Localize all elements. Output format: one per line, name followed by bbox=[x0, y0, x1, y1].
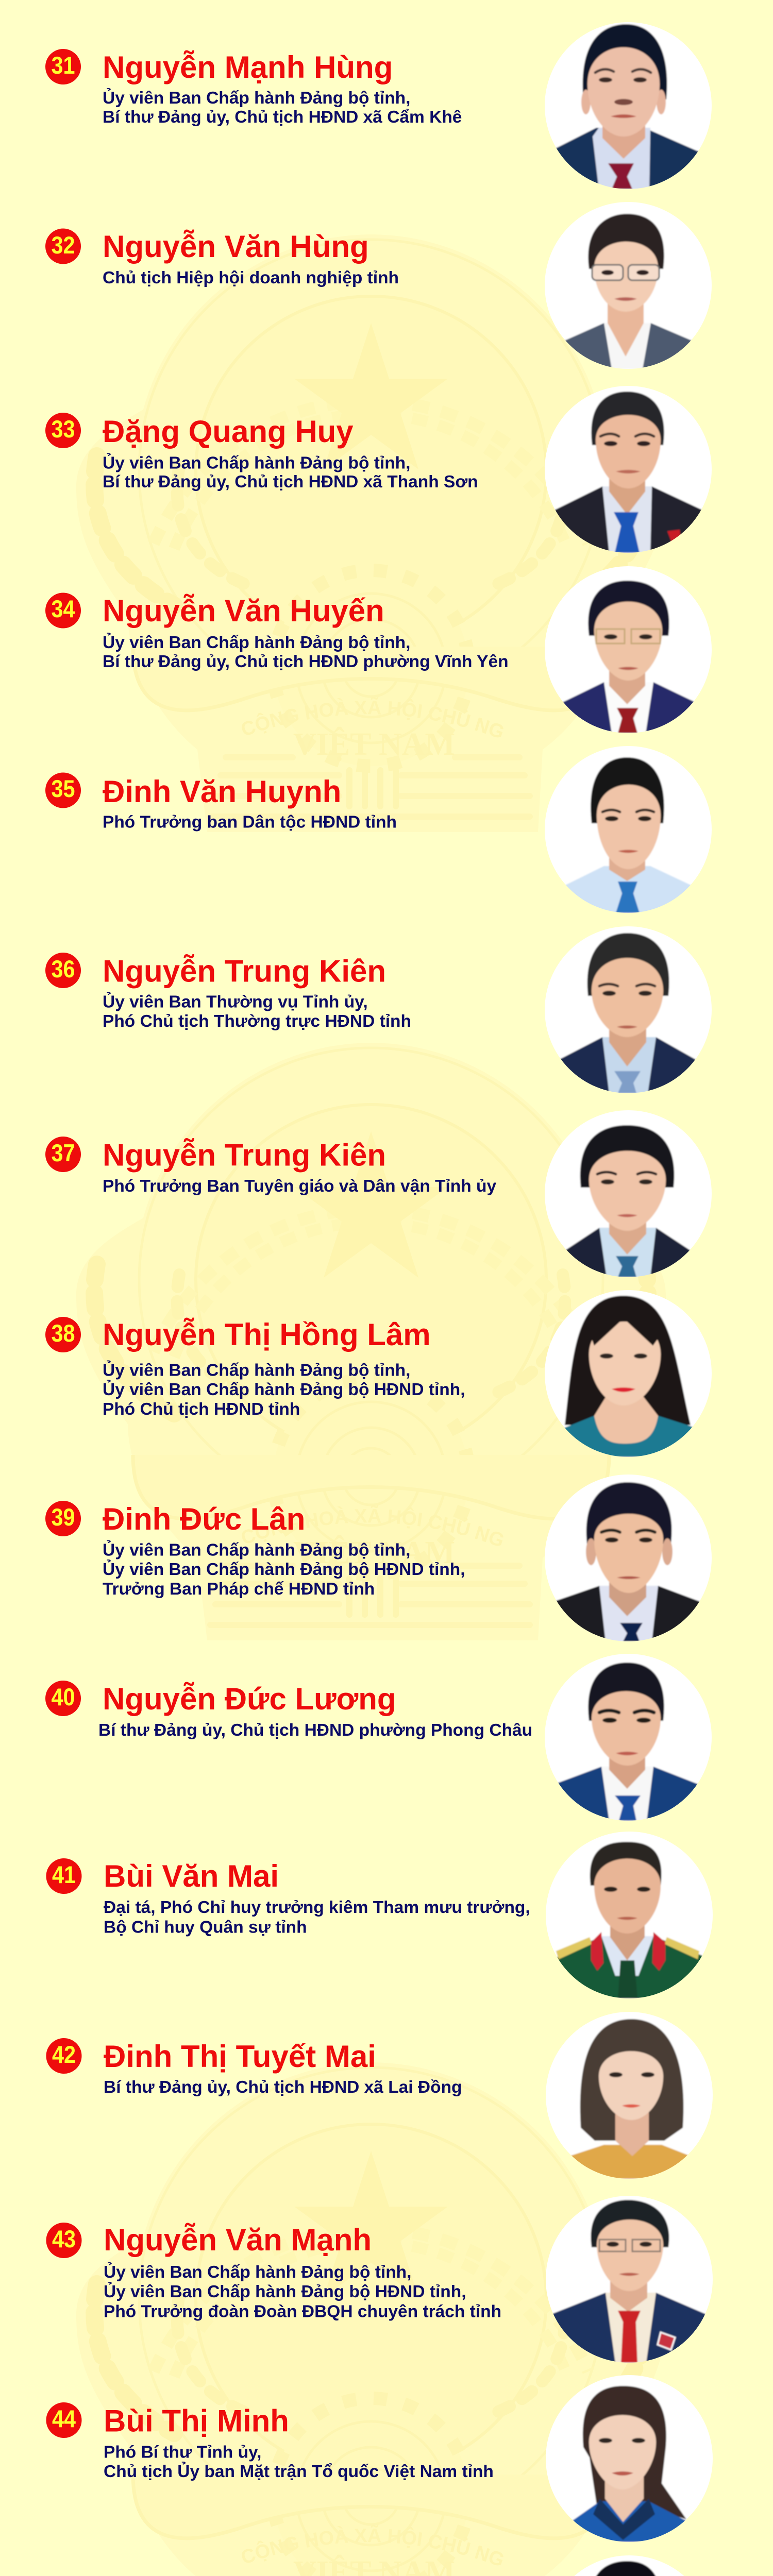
number badge 40: 40 bbox=[52, 1683, 75, 1710]
emblem watermark 2 bbox=[76, 1043, 666, 1640]
number badge 34 bbox=[45, 592, 81, 629]
name 43: Nguyễn Văn Mạnh bbox=[104, 2223, 372, 2257]
role 32: Chủ tịch Hiệp hội doanh nghiệp tỉnh bbox=[103, 268, 399, 287]
number badge 38: 38 bbox=[52, 1319, 75, 1347]
entry 34 bbox=[45, 562, 716, 737]
portrait 36 bbox=[541, 922, 716, 1097]
role 39: Trưởng Ban Pháp chế HĐND tỉnh bbox=[103, 1580, 375, 1599]
number badge 44 bbox=[46, 2402, 81, 2438]
role 43: Ủy viên Ban Chấp hành Đảng bộ HĐND tỉnh, bbox=[104, 2282, 466, 2301]
number badge 31 bbox=[45, 49, 81, 84]
emblem watermark 1: VIỆT NAM bbox=[293, 727, 455, 762]
name 33: Đặng Quang Huy bbox=[103, 414, 354, 449]
entry 42 bbox=[46, 2008, 717, 2183]
emblem watermark 3: CỘNG HOÀ XÃ HỘI CHỦ NGHĨA bbox=[242, 2525, 503, 2566]
emblem watermark 1: CỘNG HOÀ XÃ HỘI CHỦ NGHĨA bbox=[242, 697, 503, 738]
number badge 40 bbox=[45, 1681, 81, 1716]
role 38: Phó Chủ tịch HĐND tỉnh bbox=[103, 1400, 300, 1419]
name 39: Đinh Đức Lân bbox=[103, 1502, 305, 1536]
role 33: Ủy viên Ban Chấp hành Đảng bộ tỉnh, bbox=[103, 453, 410, 473]
name 34: Nguyễn Văn Huyến bbox=[103, 594, 384, 628]
number badge 34: 34 bbox=[52, 595, 75, 622]
portrait 40 bbox=[541, 1650, 716, 1825]
portrait 32 bbox=[541, 198, 716, 373]
number badge 43 bbox=[46, 2223, 81, 2258]
role 33: Bí thư Đảng ủy, Chủ tịch HĐND xã Thanh Sơn bbox=[103, 472, 478, 492]
name 35: Đinh Văn Huynh bbox=[103, 774, 341, 809]
number badge 31: 31 bbox=[52, 52, 75, 79]
entry 38 bbox=[45, 1286, 716, 1461]
portrait 33 bbox=[541, 382, 716, 557]
name 37: Nguyễn Trung Kiên bbox=[103, 1138, 386, 1173]
emblem watermark 2: VIỆT NAM bbox=[293, 1535, 455, 1570]
role 38: Ủy viên Ban Chấp hành Đảng bộ HĐND tỉnh, bbox=[103, 1380, 465, 1399]
role 34: Bí thư Đảng ủy, Chủ tịch HĐND phường Vĩnh Yên bbox=[103, 652, 509, 671]
entry 31 bbox=[45, 18, 716, 193]
number badge 37: 37 bbox=[52, 1139, 75, 1166]
role 35: Phó Trưởng ban Dân tộc HĐND tỉnh bbox=[103, 813, 397, 832]
name 32: Nguyễn Văn Hùng bbox=[103, 229, 369, 264]
number badge 32 bbox=[45, 229, 81, 264]
role 39: Ủy viên Ban Chấp hành Đảng bộ tỉnh, bbox=[103, 1540, 410, 1560]
number badge 38 bbox=[45, 1317, 81, 1352]
entry 39 bbox=[45, 1470, 716, 1646]
role 43: Ủy viên Ban Chấp hành Đảng bộ tỉnh, bbox=[104, 2262, 411, 2282]
role 44: Phó Bí thư Tỉnh ủy, bbox=[104, 2443, 262, 2462]
number badge 37 bbox=[45, 1137, 81, 1172]
portrait 44 bbox=[542, 2371, 717, 2546]
number badge 36 bbox=[45, 953, 81, 988]
entry 43 bbox=[46, 2192, 717, 2367]
role 34: Ủy viên Ban Chấp hành Đảng bộ tỉnh, bbox=[103, 633, 410, 652]
role 31: Ủy viên Ban Chấp hành Đảng bộ tỉnh, bbox=[103, 88, 410, 108]
number badge 35 bbox=[45, 773, 81, 808]
portrait 38 bbox=[541, 1286, 716, 1461]
entry 44 bbox=[46, 2371, 717, 2546]
emblem watermark 2: CỘNG HOÀ XÃ HỘI CHỦ NGHĨA bbox=[242, 1505, 503, 1546]
portrait 43 bbox=[542, 2192, 717, 2367]
number badge 39: 39 bbox=[52, 1503, 75, 1531]
portrait 41 bbox=[542, 1827, 717, 2003]
role 38: Ủy viên Ban Chấp hành Đảng bộ tỉnh, bbox=[103, 1360, 410, 1380]
number badge 43: 43 bbox=[52, 2225, 76, 2252]
portrait 39 bbox=[541, 1470, 716, 1646]
number badge 36: 36 bbox=[52, 955, 75, 982]
portrait 37 bbox=[541, 1106, 716, 1281]
portrait 35 bbox=[541, 742, 716, 917]
portrait 45 bbox=[542, 2551, 717, 2576]
number badge 41 bbox=[46, 1858, 81, 1894]
name 42: Đinh Thị Tuyết Mai bbox=[104, 2039, 376, 2074]
role 37: Phó Trưởng Ban Tuyên giáo và Dân vận Tỉnh ủy bbox=[103, 1177, 496, 1196]
entry 32 bbox=[45, 198, 716, 373]
role 42: Bí thư Đảng ủy, Chủ tịch HĐND xã Lai Đồng bbox=[104, 2078, 462, 2097]
portrait 34 bbox=[541, 562, 716, 737]
role 41: Bộ Chỉ huy Quân sự tỉnh bbox=[104, 1918, 307, 1937]
role 40: Bí thư Đảng ủy, Chủ tịch HĐND phường Phong Châu bbox=[98, 1721, 532, 1740]
entry 41 bbox=[46, 1827, 717, 2003]
role 43: Phó Trưởng đoàn Đoàn ĐBQH chuyên trách tỉnh bbox=[104, 2302, 501, 2321]
number badge 32: 32 bbox=[52, 231, 75, 259]
name 44: Bùi Thị Minh bbox=[104, 2404, 289, 2438]
name 41: Bùi Văn Mai bbox=[104, 1859, 279, 1893]
number badge 42: 42 bbox=[52, 2041, 76, 2068]
entry 36 bbox=[45, 922, 716, 1097]
name 36: Nguyễn Trung Kiên bbox=[103, 954, 386, 988]
entry 37 bbox=[45, 1106, 716, 1281]
name 38: Nguyễn Thị Hồng Lâm bbox=[103, 1317, 431, 1352]
name 31: Nguyễn Mạnh Hùng bbox=[103, 50, 393, 84]
portrait 31 bbox=[541, 18, 716, 193]
number badge 42 bbox=[46, 2038, 81, 2074]
role 31: Bí thư Đảng ủy, Chủ tịch HĐND xã Cẩm Khê bbox=[103, 108, 462, 127]
role 44: Chủ tịch Ủy ban Mặt trận Tổ quốc Việt Nam tỉnh bbox=[104, 2462, 494, 2481]
number badge 41: 41 bbox=[52, 1861, 76, 1888]
number badge 44: 44 bbox=[52, 2405, 76, 2432]
number badge 33 bbox=[45, 413, 81, 448]
role 39: Ủy viên Ban Chấp hành Đảng bộ HĐND tỉnh, bbox=[103, 1560, 465, 1579]
role 36: Phó Chủ tịch Thường trực HĐND tỉnh bbox=[103, 1012, 411, 1031]
role 41: Đại tá, Phó Chỉ huy trưởng kiêm Tham mưu trưởng, bbox=[104, 1898, 530, 1917]
entry 40 bbox=[45, 1650, 716, 1825]
entry 45 bbox=[46, 2551, 717, 2576]
portrait 42 bbox=[542, 2008, 717, 2183]
entry 35 bbox=[45, 742, 716, 917]
role 36: Ủy viên Ban Thường vụ Tỉnh ủy, bbox=[103, 992, 368, 1012]
emblem watermark 1 bbox=[76, 234, 654, 832]
number badge 39 bbox=[45, 1501, 81, 1536]
number badge 33: 33 bbox=[52, 415, 75, 443]
number badge 35: 35 bbox=[52, 775, 75, 802]
entry 33 bbox=[45, 382, 716, 557]
name 40: Nguyễn Đức Lương bbox=[103, 1682, 396, 1716]
